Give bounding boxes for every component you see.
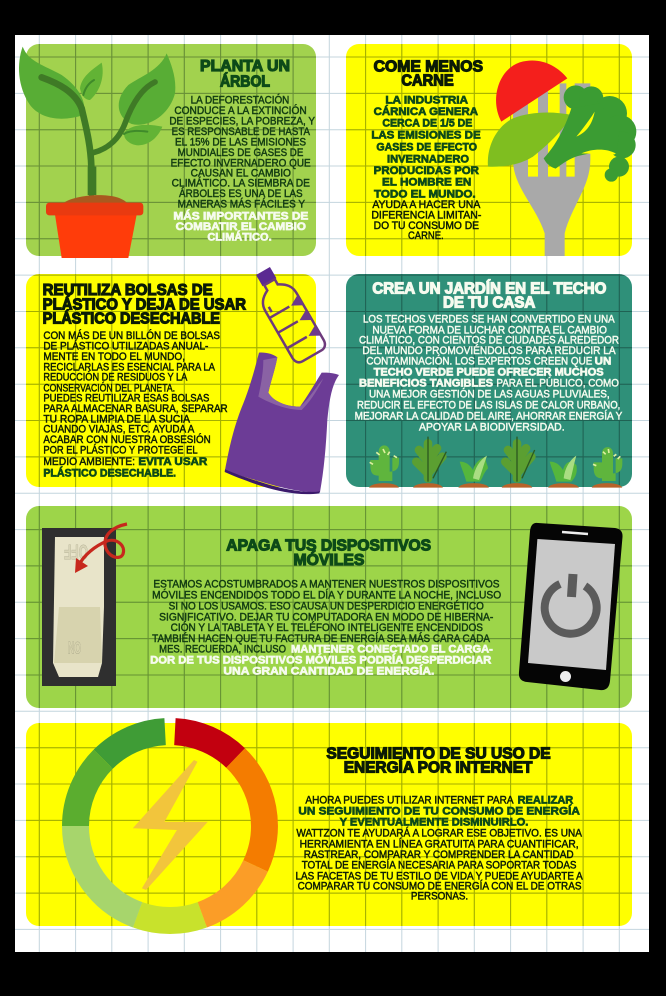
text: planta un árbol body: COMBATIR EL CAMBIO bbox=[176, 221, 306, 233]
text: planta un árbol body: CLIMÁTICO. bbox=[207, 231, 272, 244]
text: seguimiento de energía body: RASTREAR, COMPARAR Y COMPRENDER LA CANTIDAD bbox=[304, 848, 574, 861]
text: planta un árbol body: DE ESPECIES, LA POBREZA, Y bbox=[169, 115, 315, 127]
text: reutiliza bolsas body: CUANDO VIAJAS, ETC. AYUDA A bbox=[43, 424, 195, 436]
text: planta un árbol body: CONDUCE A LA EXTINCIÓN bbox=[174, 104, 307, 117]
text: jardín en el techo body: CONTAMINACIÓN. LOS EXPERTOS CREEN QUE bbox=[366, 355, 592, 368]
text: apaga dispositivos body: DOR DE TUS DISPOSITIVOS MÓVILES PODRÍA DESPERDICIAR bbox=[150, 653, 492, 666]
heading: reutiliza bolsas: REUTILIZA BOLSAS DE bbox=[43, 282, 213, 299]
icon: row of rooftop plants bbox=[369, 437, 622, 488]
text: apaga dispositivos body: MES. RECUERDA, INCLUSO bbox=[159, 643, 286, 655]
text: reutiliza bolsas body: RECICLARLAS ES ESENCIAL PARA LA bbox=[43, 362, 216, 374]
text: reutiliza bolsas body: PUEDES REUTILIZAR ESAS BOLSAS bbox=[43, 393, 209, 405]
text: apaga dispositivos body bbox=[150, 578, 501, 677]
icon: plant in red pot bbox=[19, 47, 175, 258]
text: jardín en el techo body: NUEVA FORMA DE LUCHAR CONTRA EL CAMBIO bbox=[372, 324, 607, 336]
text: seguimiento de energía body: AHORA PUEDES UTILIZAR INTERNET PARA bbox=[305, 794, 514, 806]
text: come menos carne body: CERCA DE 1/5 DE bbox=[382, 118, 472, 130]
panel: reutiliza bolsas bbox=[26, 262, 339, 494]
text: reutiliza bolsas body: CONSERVACIÓN DEL PLANETA. bbox=[43, 381, 175, 394]
heading: reutiliza bolsas: PLÁSTICO Y DEJA DE USAR bbox=[43, 297, 246, 314]
text: jardín en el techo body: MEJORAR LA CALIDAD DEL AIRE, AHORRAR ENERGÍA Y bbox=[355, 409, 622, 422]
panel: planta un árbol bbox=[19, 44, 316, 258]
text: jardín en el techo body bbox=[355, 314, 622, 433]
text: come menos carne body: EL HOMBRE EN bbox=[382, 177, 471, 189]
text: seguimiento de energía body bbox=[296, 794, 583, 902]
text: reutiliza bolsas body: EVITA USAR bbox=[138, 456, 208, 468]
heading: seguimiento de energía: SEGUIMIENTO DE SU USO DE bbox=[326, 744, 551, 762]
panel: apaga dispositivos bbox=[26, 506, 632, 708]
text: planta un árbol body: MUNDIALES DE GASES DE bbox=[178, 147, 303, 159]
text: come menos carne body: CÁRNICA GENERA bbox=[374, 105, 478, 118]
heading: jardín en el techo: CREA UN JARDÍN EN EL TECHO bbox=[372, 280, 606, 297]
icon: fork with tomato, leaf and broccoli bbox=[488, 61, 636, 256]
icon: purple plastic bag bbox=[225, 353, 339, 494]
text: planta un árbol body: EL 15% DE LAS EMISIONES bbox=[175, 137, 306, 149]
text: jardín en el techo body: LOS TECHOS VERDES SE HAN CONVERTIDO EN UNA bbox=[363, 314, 615, 326]
heading: planta un árbol: ÁRBOL bbox=[220, 73, 270, 90]
text: come menos carne body: DO TU CONSUMO DE bbox=[374, 220, 479, 232]
text: jardín en el techo body: PARA EL PÚBLICO, COMO bbox=[496, 377, 619, 390]
heading: apaga dispositivos: MÓVILES bbox=[293, 551, 364, 569]
text: apaga dispositivos body: MANTENER CONECTADO EL CARGA- bbox=[291, 643, 493, 655]
icon: plastic bottle bbox=[247, 262, 328, 365]
text: come menos carne body: LAS EMISIONES DE bbox=[371, 129, 481, 141]
text: planta un árbol body: CLIMÁTICO. LA SIEMBRA DE bbox=[172, 177, 310, 190]
icon: energy ring with lightning bolt bbox=[76, 732, 264, 920]
text: come menos carne body: TODO EL MUNDO. bbox=[374, 188, 476, 200]
text: apaga dispositivos body: ESTAMOS ACOSTUMBRADOS A MANTENER NUESTROS DISPOSITIVOS bbox=[153, 578, 499, 590]
text: planta un árbol body bbox=[169, 93, 315, 244]
text: apaga dispositivos body: SIGNIFICATIVO. DEJAR TU COMPUTADORA EN MODO DE HIBERNA- bbox=[159, 611, 493, 623]
text: planta un árbol body: ES RESPONSABLE DE HASTA bbox=[172, 126, 311, 138]
heading: reutiliza bolsas bbox=[43, 282, 246, 328]
icon: power switch with red arrow: OFF bbox=[64, 540, 88, 562]
text: jardín en el techo body: CLIMÁTICO, CON CIENTOS DE CIUDADES ALREDEDOR bbox=[359, 334, 619, 347]
text: seguimiento de energía body: HERRAMIENTA EN LÍNEA GRATUITA PARA CUANTIFICAR, bbox=[300, 837, 579, 850]
text: planta un árbol body: EFECTO INVERNADERO QUE bbox=[171, 157, 311, 169]
text: come menos carne body: DIFERENCIA LIMITAN- bbox=[371, 209, 482, 221]
text: jardín en el techo body: UN bbox=[595, 356, 611, 368]
text: reutiliza bolsas body bbox=[43, 329, 228, 480]
text: apaga dispositivos body: UNA GRAN CANTIDAD DE ENERGÍA. bbox=[223, 664, 434, 677]
icon: smartphone with power symbol bbox=[519, 523, 623, 690]
text: apaga dispositivos body: MÓVILES ENCENDIDOS TODO EL DÍA Y DURANTE LA NOCHE, INCLUSO bbox=[152, 588, 501, 601]
text: come menos carne body: CARNE. bbox=[408, 230, 444, 242]
text: come menos carne body: INVERNADERO bbox=[387, 153, 469, 165]
text: reutiliza bolsas body: TU ROPA LIMPIA DE LA SUCIA bbox=[43, 413, 191, 425]
text: jardín en el techo body: TECHO VERDE PUEDE OFRECER MUCHOS bbox=[374, 367, 604, 379]
text: reutiliza bolsas body: DE PLÁSTICO UTILIZADAS ANUAL- bbox=[43, 339, 209, 352]
text: seguimiento de energía body: UN SEGUIMIENTO DE TU CONSUMO DE ENERGÍA bbox=[298, 804, 580, 817]
text: reutiliza bolsas body: CON MÁS DE UN BILLÓN DE BOLSAS bbox=[43, 329, 220, 342]
heading: reutiliza bolsas: PLÁSTICO DESECHABLE bbox=[43, 311, 220, 328]
heading: jardín en el techo bbox=[372, 280, 606, 312]
text: jardín en el techo body: DEL MUNDO PROMOVIÉNDOLOS PARA REDUCIR LA bbox=[362, 344, 617, 357]
heading: planta un árbol bbox=[200, 58, 290, 90]
heading: planta un árbol: PLANTA UN bbox=[200, 58, 290, 75]
text: reutiliza bolsas body: PLÁSTICO DESECHABLE. bbox=[43, 467, 176, 480]
text: jardín en el techo body: UNA MEJOR GESTIÓN DE LAS AGUAS PLUVIALES, bbox=[369, 388, 610, 401]
text: reutiliza bolsas body: REDUCCIÓN DE RESIDUOS Y LA bbox=[43, 371, 188, 384]
text: reutiliza bolsas body: ACABAR CON NUESTRA OBSESIÓN bbox=[43, 433, 211, 446]
text: reutiliza bolsas body: PARA ALMACENAR BASURA, SEPARAR bbox=[43, 403, 228, 415]
text: seguimiento de energía body: COMPARAR TU CONSUMO DE ENERGÍA CON EL DE OTRAS bbox=[298, 879, 581, 892]
text: come menos carne body: PRODUCIDAS POR bbox=[374, 165, 479, 177]
heading: apaga dispositivos bbox=[226, 536, 431, 569]
panel: jardín en el techo bbox=[346, 274, 632, 488]
text: come menos carne body: AYUDA A HACER UNA bbox=[372, 199, 481, 211]
text: planta un árbol body: CAUSAN EL CAMBIO bbox=[191, 167, 291, 179]
text: apaga dispositivos body: SI NO LOS USAMOS. ESO CAUSA UN DESPERDICIO ENERGÉTICO bbox=[169, 599, 484, 612]
heading: apaga dispositivos: APAGA TUS DISPOSITIVOS bbox=[226, 536, 431, 554]
icon: power switch with red arrow bbox=[42, 524, 127, 686]
text: apaga dispositivos body: CIÓN Y LA TABLETA Y EL TELÉFONO INTELIGENTE ENCENDIDOS bbox=[171, 620, 483, 634]
text: reutiliza bolsas body: POR EL PLÁSTICO Y PROTEGE EL bbox=[43, 443, 198, 456]
icon: power switch with red arrow: ON bbox=[68, 638, 81, 657]
heading: come menos carne: COME MENOS bbox=[374, 59, 483, 76]
text: jardín en el techo body: REDUCIR EL EFECTO DE LAS ISLAS DE CALOR URBANO, bbox=[357, 400, 620, 412]
text: seguimiento de energía body: TOTAL DE ENERGÍA NECESARIA PARA SOPORTAR TODAS bbox=[302, 858, 577, 871]
heading: seguimiento de energía: ENERGÍA POR INTERNET bbox=[344, 758, 533, 776]
text: jardín en el techo body: BENEFICIOS TANGIBLES bbox=[359, 378, 493, 390]
text: planta un árbol body: LA DEFORESTACIÓN bbox=[191, 93, 289, 106]
text: jardín en el techo body: APOYAR LA BIODIVERSIDAD. bbox=[419, 421, 565, 433]
heading: come menos carne bbox=[374, 59, 483, 90]
text: reutiliza bolsas body: MENTE EN TODO EL MUNDO, bbox=[43, 351, 185, 363]
text: planta un árbol body: ÁRBOLES ES UNA DE LAS bbox=[179, 187, 303, 200]
heading: seguimiento de energía bbox=[326, 744, 551, 776]
text: reutiliza bolsas body: MEDIO AMBIENTE: bbox=[43, 456, 135, 468]
text: planta un árbol body: MÁS IMPORTANTES DE bbox=[173, 209, 308, 222]
heading: jardín en el techo: DE TU CASA bbox=[443, 295, 535, 312]
text: planta un árbol body: MANERAS MÁS FÁCILES Y bbox=[178, 197, 305, 210]
text: seguimiento de energía body: REALIZAR bbox=[518, 794, 574, 806]
text: seguimiento de energía body: Y EVENTUALMENTE DISMINUIRLO. bbox=[340, 816, 528, 828]
text: apaga dispositivos body: TAMBIÉN HACEN QUE TU FACTURA DE ENERGÍA SEA MÁS CARA CADA bbox=[152, 631, 490, 645]
text: come menos carne body bbox=[371, 94, 482, 242]
text: seguimiento de energía body: WATTZON TE AYUDARÁ A LOGRAR ESE OBJETIVO. ES UNA bbox=[296, 826, 582, 839]
text: come menos carne body: LA INDUSTRIA bbox=[385, 94, 468, 106]
heading: come menos carne: CARNE bbox=[401, 73, 454, 90]
text: seguimiento de energía body: PERSONAS. bbox=[411, 890, 468, 902]
text: come menos carne body: GASES DE EFECTO bbox=[376, 142, 477, 154]
panel: seguimiento de energía bbox=[26, 723, 632, 926]
panel: come menos carne bbox=[346, 44, 636, 256]
